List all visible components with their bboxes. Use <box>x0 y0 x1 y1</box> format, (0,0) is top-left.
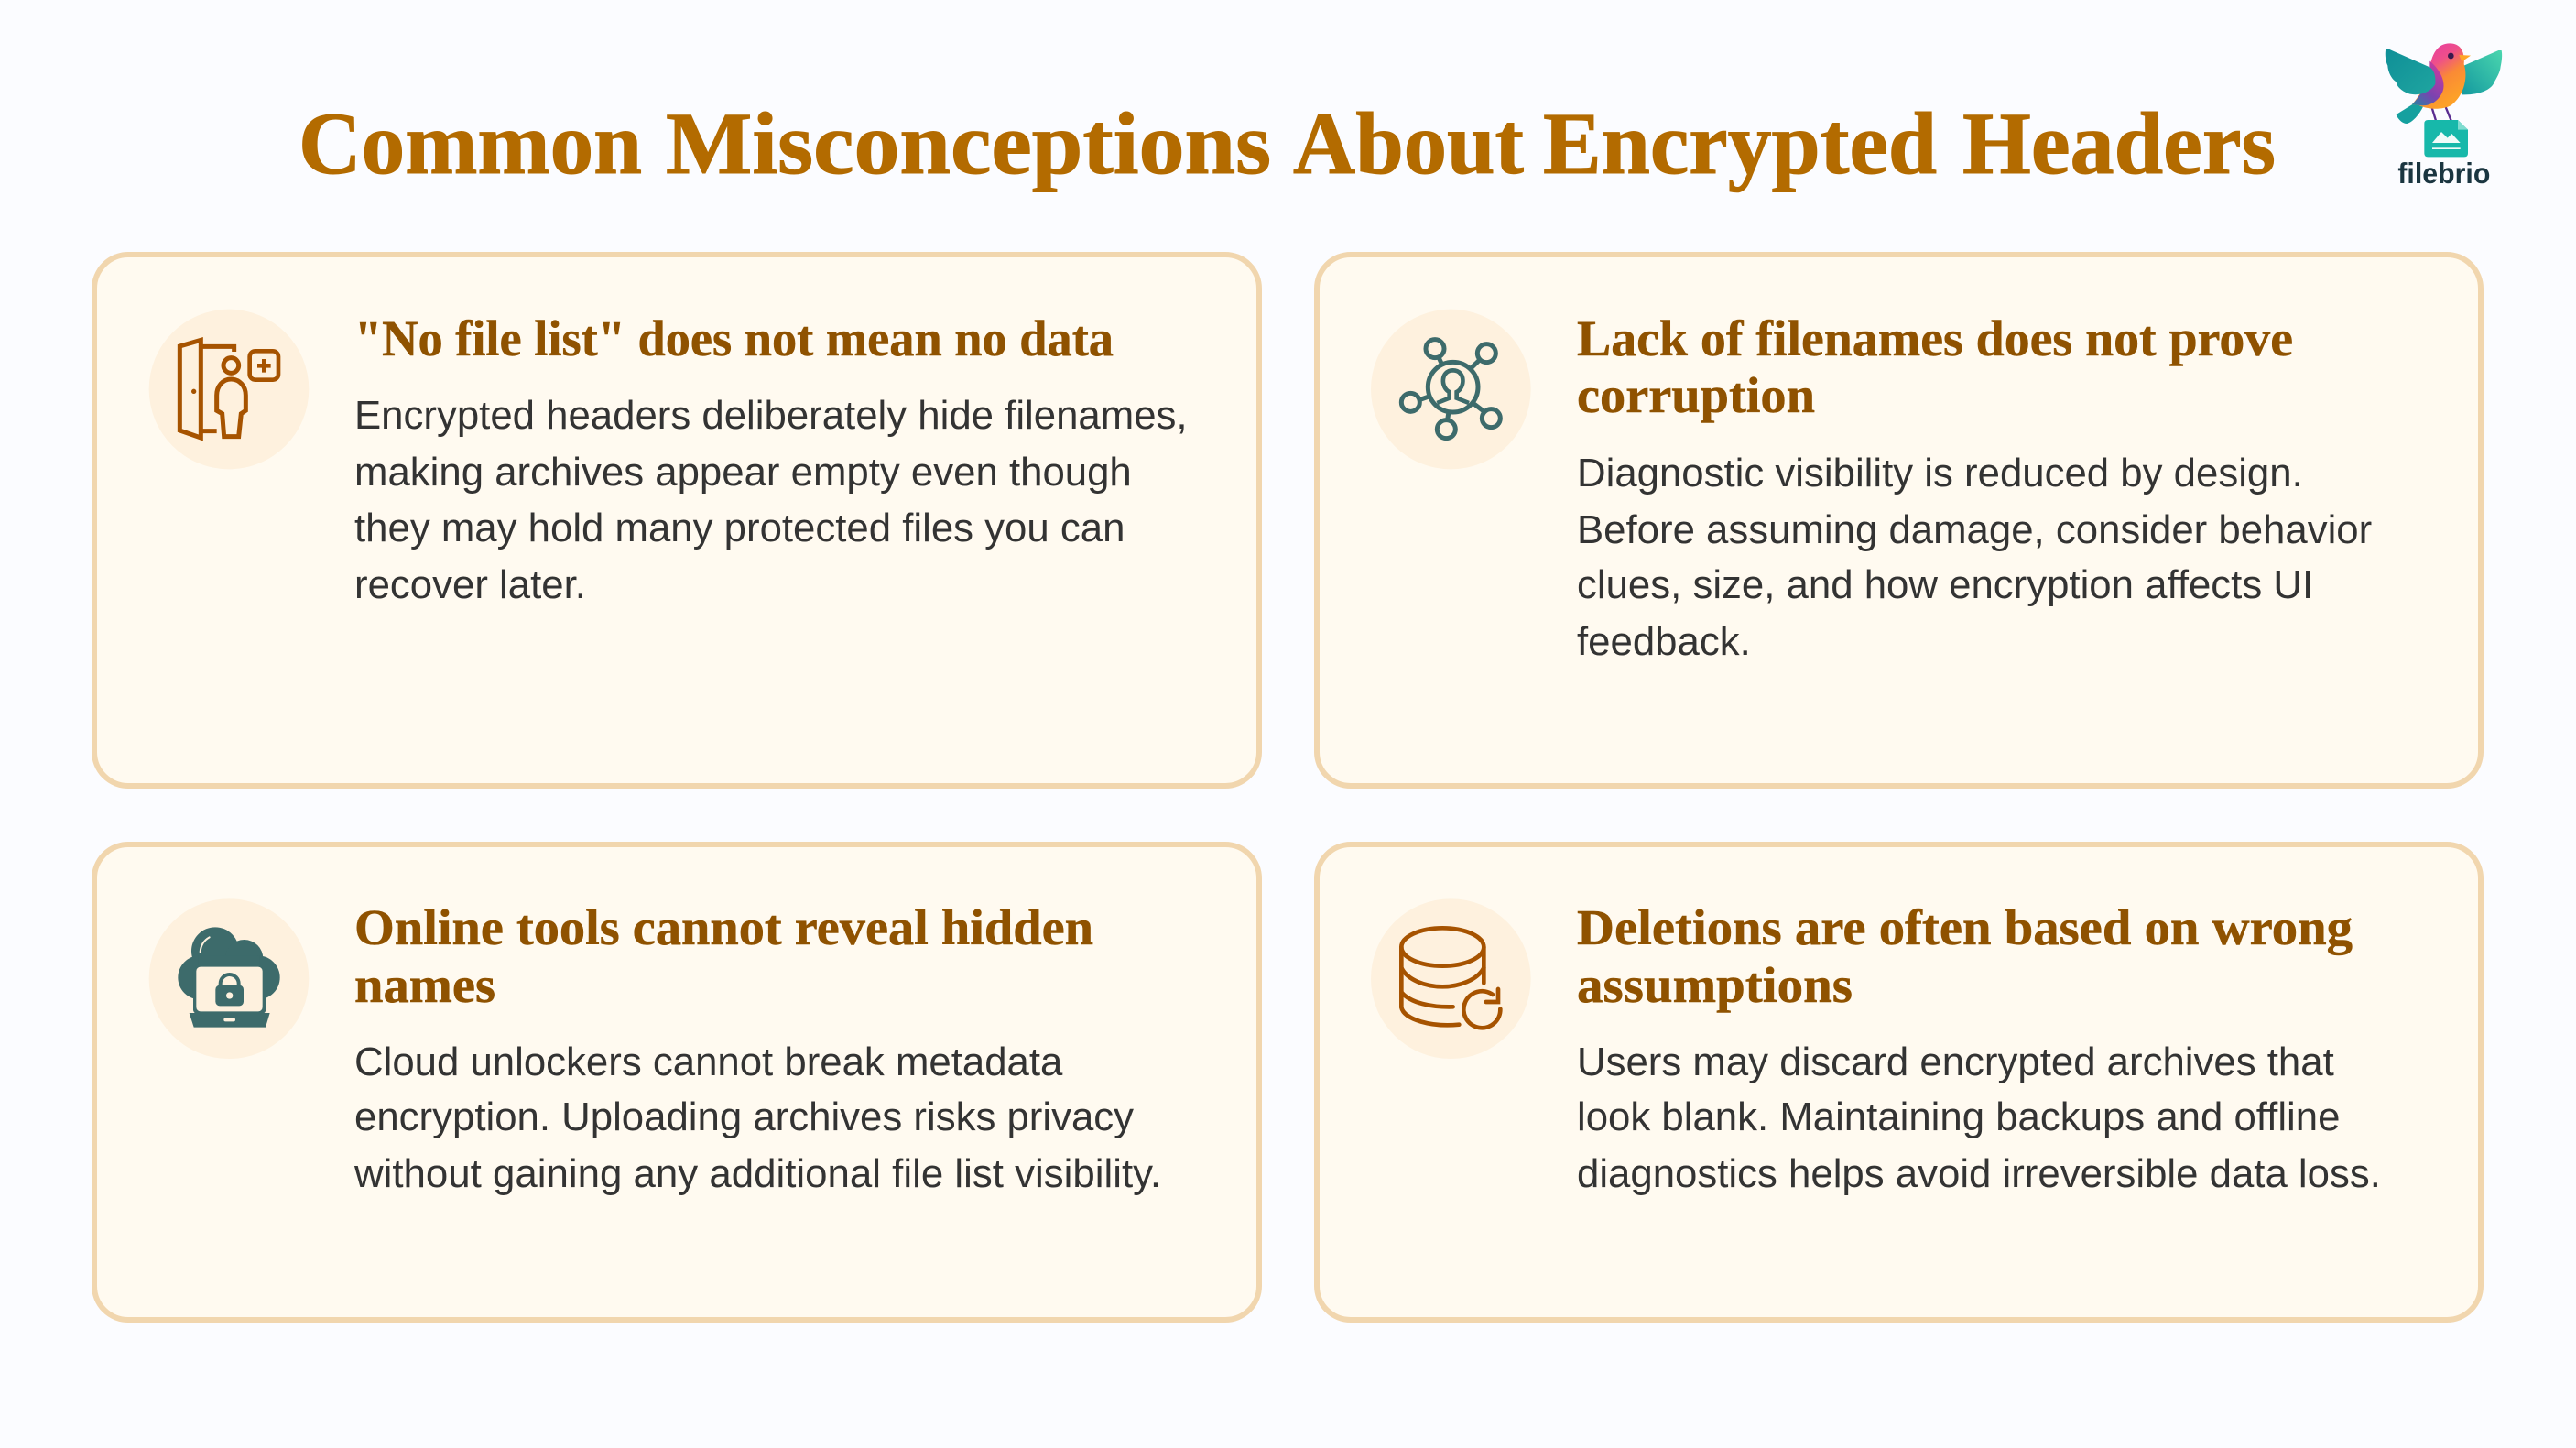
logo: filebrio bird: filebrio <box>2397 158 2490 190</box>
heading: Deletions are often based on wrong <box>1577 899 2353 955</box>
body text: diagnostics helps avoid irreversible data loss. <box>1577 1151 2381 1196</box>
heading: "No file list" does not mean no data <box>354 310 1114 366</box>
panel: lack of filenames <box>1317 255 2481 786</box>
title: Encrypted <box>1543 94 1937 192</box>
panel: no file list <box>94 255 1259 786</box>
body text: without gaining any additional file list visibility. <box>353 1151 1161 1196</box>
body text: Encrypted headers deliberately hide filenames, <box>354 393 1188 438</box>
body text <box>354 393 1188 607</box>
body text: making archives appear empty even though <box>354 450 1132 495</box>
body text: feedback. <box>1577 619 1751 664</box>
title: About <box>1293 94 1524 192</box>
title: Common <box>299 94 642 192</box>
heading: Online tools cannot reveal hidden <box>354 899 1093 955</box>
body text: look blank. Maintaining backups and offline <box>1577 1094 2340 1139</box>
title: Headers <box>1962 94 2276 192</box>
icon: database with refresh <box>1371 898 1531 1059</box>
body text <box>353 1040 1161 1196</box>
body text: Diagnostic visibility is reduced by design. <box>1577 451 2303 495</box>
icon: cloud laptop lock <box>149 898 309 1059</box>
heading: assumptions <box>1577 957 1853 1013</box>
body text: clues, size, and how encryption affects UI <box>1577 562 2313 607</box>
icon: user network <box>1371 310 1531 469</box>
icon: person at door with plus sign <box>149 310 309 469</box>
body text: Before assuming damage, consider behavior <box>1577 507 2372 552</box>
body text: encryption. Uploading archives risks privacy <box>354 1094 1134 1139</box>
body text: Users may discard encrypted archives that <box>1577 1040 2334 1084</box>
body text: they may hold many protected files you can <box>354 506 1125 550</box>
body text: recover later. <box>354 562 586 607</box>
panel: deletions <box>1317 844 2481 1320</box>
title: Misconceptions <box>666 94 1271 192</box>
panel: online tools <box>94 844 1259 1320</box>
heading: Lack of filenames does not prove <box>1577 310 2293 366</box>
body text: Cloud unlockers cannot break metadata <box>354 1040 1063 1084</box>
body text <box>1577 1040 2381 1196</box>
logo: filebrio bird <box>2386 43 2502 190</box>
body text <box>1577 451 2372 664</box>
heading <box>1577 899 2353 1013</box>
heading: names <box>354 957 495 1013</box>
heading <box>354 899 1093 1013</box>
heading <box>1577 310 2293 423</box>
heading: corruption <box>1577 367 1815 423</box>
